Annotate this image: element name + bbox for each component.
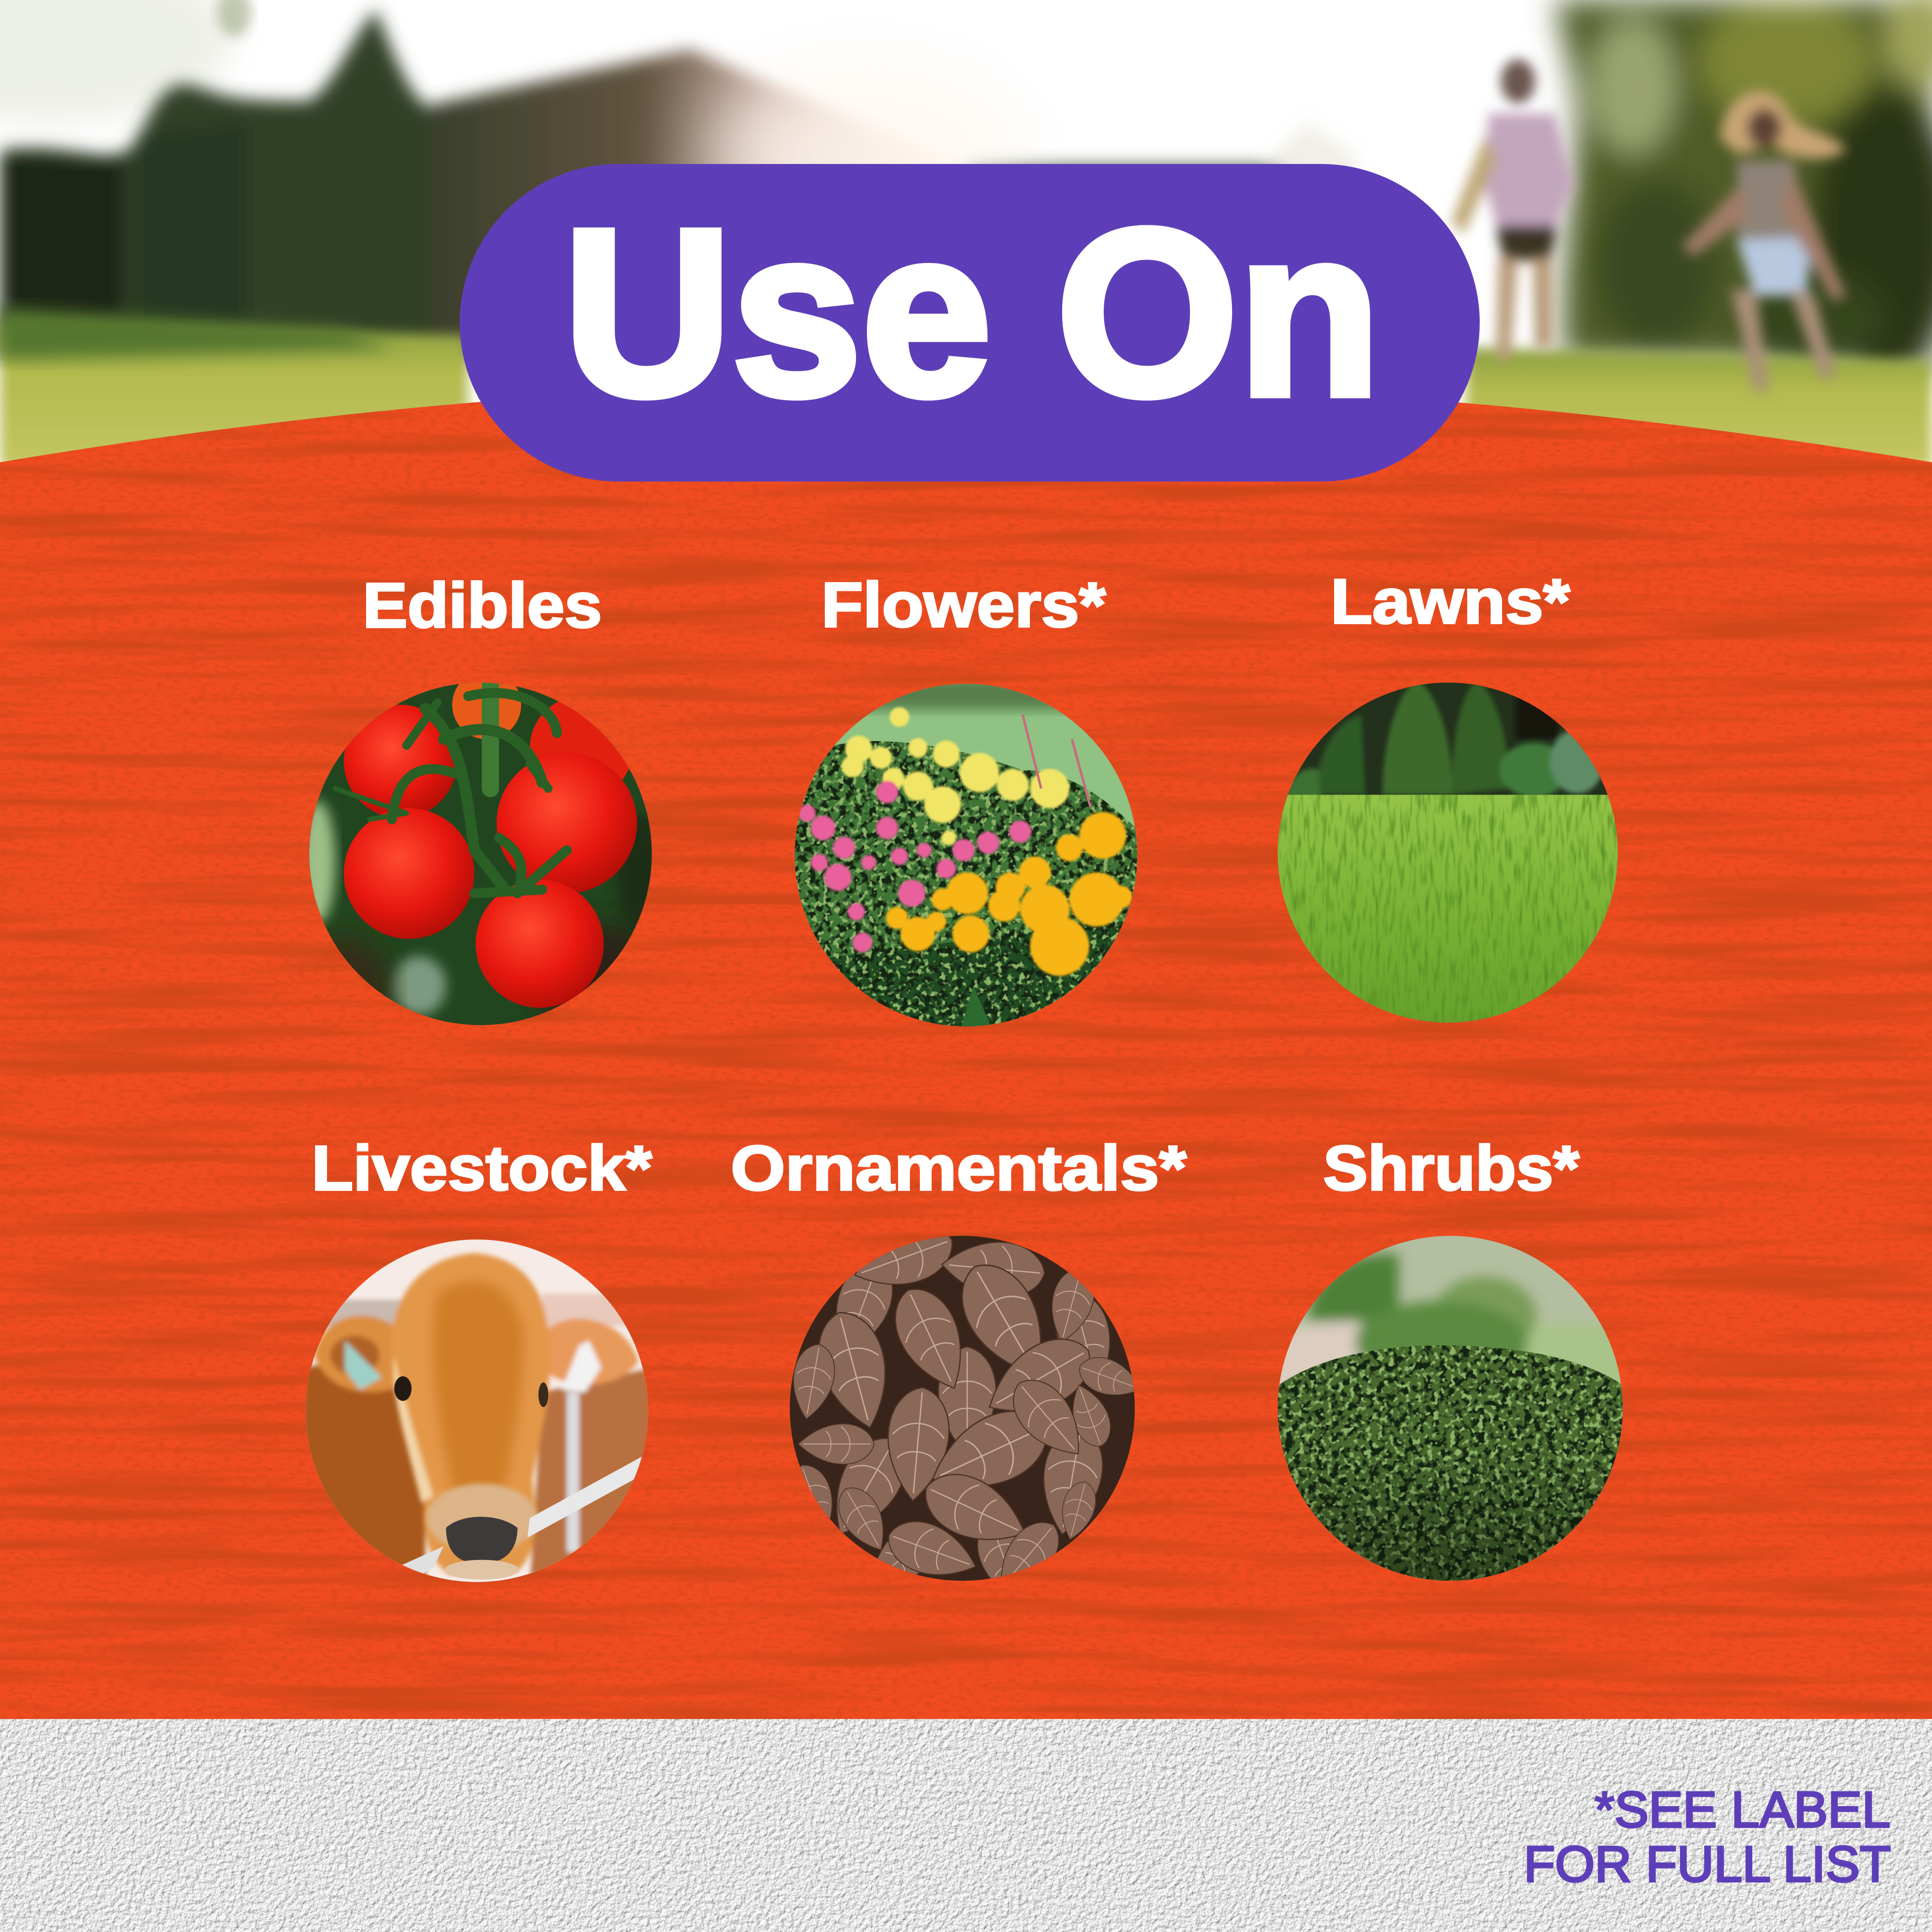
photo: bronze foliage [784,1214,1147,1609]
orange wood-texture panel with curved top [0,381,1932,1719]
background photo: blurred backyard with running children [0,0,1932,495]
item: Livestock [302,1133,653,1589]
label: Shrubs: Shrubs* [1323,1133,1579,1204]
photo: green lawn with hedges [1269,678,1626,1029]
title pill [460,164,1480,482]
item: Flowers [789,570,1146,1035]
label: Edibles: Edibles [363,570,602,641]
photo: flower bed [789,678,1146,1035]
footnote line one: *SEE LABEL [1595,1781,1890,1838]
label: Flowers: Flowers* [821,570,1106,641]
item: Shrubs [1269,1133,1633,1589]
photo: jersey calf [302,1232,653,1589]
photo: tomatoes on the vine [309,683,652,1025]
photo: trimmed hedge [1269,1232,1633,1589]
child one [1451,59,1575,360]
item: Lawns [1269,566,1626,1029]
item: Ornamentals [731,1133,1186,1609]
label: Ornamentals: Ornamentals* [731,1133,1186,1204]
footnote [1524,1781,1891,1892]
label: Livestock: Livestock* [312,1133,652,1204]
title text: Use On [563,180,1381,445]
children running in background [1451,59,1846,392]
item: Edibles [309,580,652,1025]
child two [1682,91,1846,392]
white plaster footer strip [0,1719,1932,1932]
label: Lawns: Lawns* [1331,566,1570,637]
footnote line two: FOR FULL LIST [1524,1836,1891,1892]
